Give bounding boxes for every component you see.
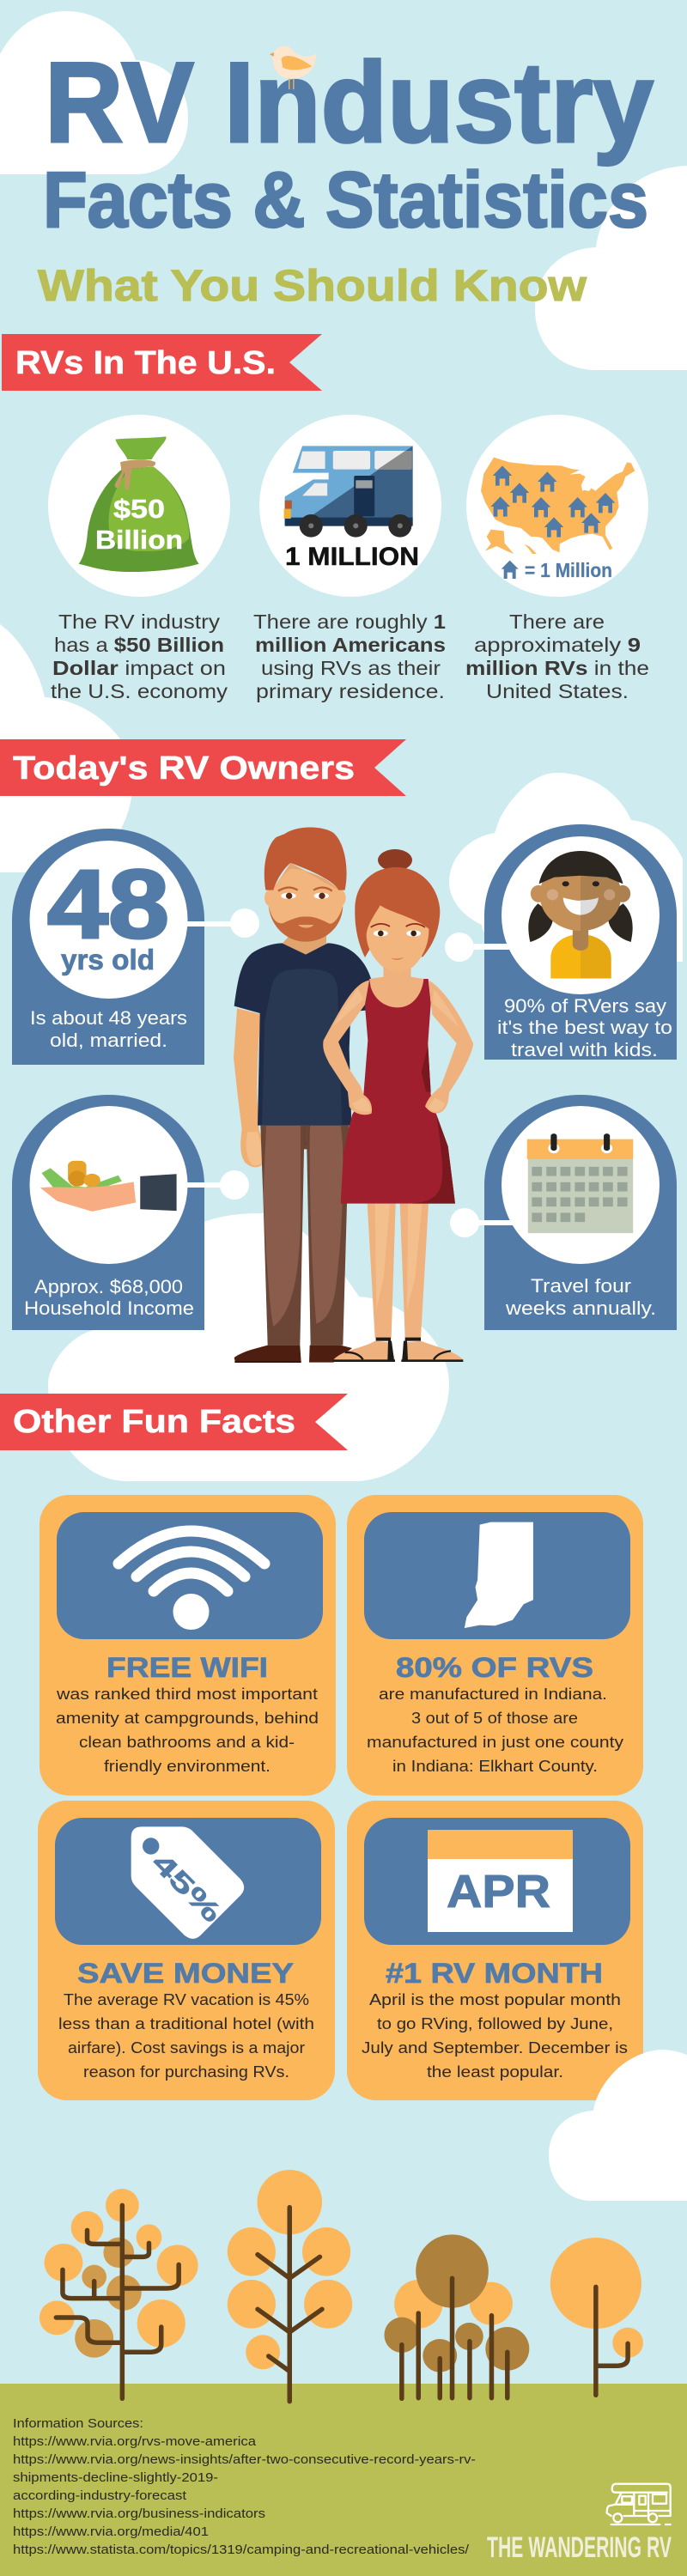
text: economic impact: has a $50 Billion xyxy=(54,634,224,656)
text: age: Is about 48 years xyxy=(30,1007,187,1029)
text: to go RVing, followed by June, xyxy=(377,2015,613,2032)
information sources: https://www.rvia.org/business-indicators xyxy=(13,2506,265,2521)
panel: age xyxy=(12,829,259,1065)
text: 3 out of 5 of those are xyxy=(411,1710,578,1727)
heading: #1 RV MONTH xyxy=(386,1958,603,1989)
information sources: Information Sources: xyxy=(13,2416,143,2431)
woman xyxy=(323,849,473,1362)
section banner: other fun facts xyxy=(0,1394,348,1450)
text: airfare). Cost savings is a major xyxy=(68,2039,305,2057)
icon: hand with money xyxy=(40,1161,177,1212)
icon: April calendar page xyxy=(428,1830,573,1932)
section banner: RVs in the U.S.: RVs In The U.S. xyxy=(15,345,276,381)
icon: calendar xyxy=(527,1133,633,1233)
text: reason for purchasing RVs. xyxy=(83,2063,289,2081)
icon: bird on title xyxy=(270,46,316,88)
text xyxy=(58,1991,314,2081)
text: manufactured in just one county xyxy=(367,1734,623,1751)
title line one: RV Industry xyxy=(45,39,654,167)
bag label: Billion xyxy=(95,525,183,555)
title xyxy=(38,39,654,310)
information sources: https://www.statista.com/topics/1319/camping-and-recreational-vehicles/ xyxy=(13,2543,470,2557)
panel: RVs in the United States xyxy=(465,415,649,702)
stat: 48: 48 xyxy=(47,850,169,958)
text: nine million RVs: approximately 9 xyxy=(474,634,641,656)
text: was ranked third most important xyxy=(56,1686,318,1703)
text: amenity at campgrounds, behind xyxy=(56,1710,319,1727)
text: nine million RVs: United States. xyxy=(486,680,629,702)
panel: travel weeks xyxy=(450,1095,677,1330)
stat unit: yrs old xyxy=(61,944,155,975)
panel: household income xyxy=(12,1095,249,1330)
icon: child xyxy=(528,851,633,979)
text: primary residence: million Americans xyxy=(255,634,446,656)
text: the least popular. xyxy=(427,2063,563,2081)
text: age: old, married. xyxy=(50,1030,167,1051)
tree four xyxy=(550,2238,643,2395)
text: economic impact: The RV industry xyxy=(58,611,221,633)
man xyxy=(234,827,372,1363)
text: travel with kids: travel with kids. xyxy=(511,1039,658,1060)
text: primary residence: There are roughly 1 xyxy=(253,611,446,633)
text: The average RV vacation is 45% xyxy=(64,1991,309,2008)
heading: FREE WIFI xyxy=(106,1652,268,1683)
text: household income: Approx. $68,000 xyxy=(34,1276,183,1297)
panel: economic impact xyxy=(48,415,230,702)
section banner: other fun facts: Other Fun Facts xyxy=(13,1404,295,1440)
card: free wifi xyxy=(40,1495,336,1795)
icon: Indiana xyxy=(465,1522,533,1628)
label: 1 million: 1 MILLION xyxy=(285,543,419,571)
subtitle: What You Should Know xyxy=(38,261,587,310)
icon: price tag: 45% xyxy=(146,1846,228,1929)
section banner: today's RV owners: Today's RV Owners xyxy=(13,750,355,787)
text xyxy=(56,1686,319,1775)
information sources: shipments-decline-slightly-2019- xyxy=(13,2470,218,2485)
information sources: https://www.rvia.org/media/401 xyxy=(13,2524,209,2539)
icon: April calendar page: APR xyxy=(447,1866,550,1917)
text: primary residence: using RVs as their xyxy=(261,657,441,679)
information sources: https://www.rvia.org/news-insights/after-two-consecutive-record-years-rv- xyxy=(13,2452,476,2467)
text: travel with kids: it's the best way to xyxy=(497,1017,672,1038)
panel: primary residence xyxy=(253,415,446,702)
icon: motorhome xyxy=(284,446,413,538)
text: household income: Household Income xyxy=(24,1297,194,1319)
text: household income xyxy=(24,1276,194,1319)
text: nine million RVs: million RVs in the xyxy=(465,657,649,679)
icon: camper outline xyxy=(607,2484,671,2524)
icon: money bag xyxy=(79,436,199,572)
text: nine million RVs: There are xyxy=(509,611,605,633)
card: save money xyxy=(38,1801,335,2100)
section banner: today's RV owners xyxy=(0,739,406,796)
card: top RV month xyxy=(347,1801,643,2100)
text: economic impact xyxy=(51,611,228,702)
illustration: trees xyxy=(40,2170,643,2402)
text: July and September. December is xyxy=(362,2039,628,2057)
icon: wifi xyxy=(119,1531,264,1625)
text: travel weeks xyxy=(505,1275,656,1319)
bag label xyxy=(95,494,183,555)
text: in Indiana: Elkhart County. xyxy=(392,1758,598,1775)
heading: 80% OF RVS xyxy=(396,1652,593,1683)
text: primary residence: primary residence. xyxy=(256,680,445,702)
text: economic impact: Dollar impact on xyxy=(52,657,226,679)
panel: travel with kids xyxy=(445,824,677,1060)
text: nine million RVs xyxy=(465,611,649,702)
text: less than a traditional hotel (with xyxy=(58,2015,314,2032)
text: primary residence xyxy=(253,611,446,702)
bag label: $50 xyxy=(113,494,165,524)
heading: SAVE MONEY xyxy=(77,1958,294,1989)
text: April is the most popular month xyxy=(369,1991,621,2008)
text: economic impact: the U.S. economy xyxy=(51,680,228,702)
legend: house equals 1 million: = 1 Million xyxy=(525,559,612,581)
section banner: RVs in the U.S. xyxy=(2,334,322,391)
tree one xyxy=(40,2189,198,2398)
text: age xyxy=(30,1007,187,1051)
information sources: https://www.rvia.org/rvs-move-america xyxy=(13,2434,257,2449)
bottom right cloud xyxy=(549,2050,687,2201)
text: are manufactured in Indiana. xyxy=(379,1686,607,1703)
text: travel weeks: Travel four xyxy=(531,1275,631,1297)
icon: price tag xyxy=(131,1826,244,1939)
text: friendly environment. xyxy=(104,1758,271,1775)
information sources: according-industry-forecast xyxy=(13,2488,187,2503)
text xyxy=(367,1686,623,1775)
text: clean bathrooms and a kid- xyxy=(79,1734,295,1751)
text: travel with kids xyxy=(497,995,672,1060)
title line two: Facts & Statistics xyxy=(43,156,648,244)
information sources xyxy=(13,2416,476,2557)
illustration: couple xyxy=(234,827,473,1363)
text: travel with kids: 90% of RVers say xyxy=(504,995,666,1017)
icon: US map with houses xyxy=(481,458,635,579)
text xyxy=(362,1991,628,2081)
tree two xyxy=(228,2170,352,2402)
text: travel weeks: weeks annually. xyxy=(505,1297,656,1319)
logo: The Wandering RV xyxy=(487,2484,672,2564)
card: 80% of RVs xyxy=(347,1495,643,1795)
tree group three xyxy=(384,2234,529,2398)
